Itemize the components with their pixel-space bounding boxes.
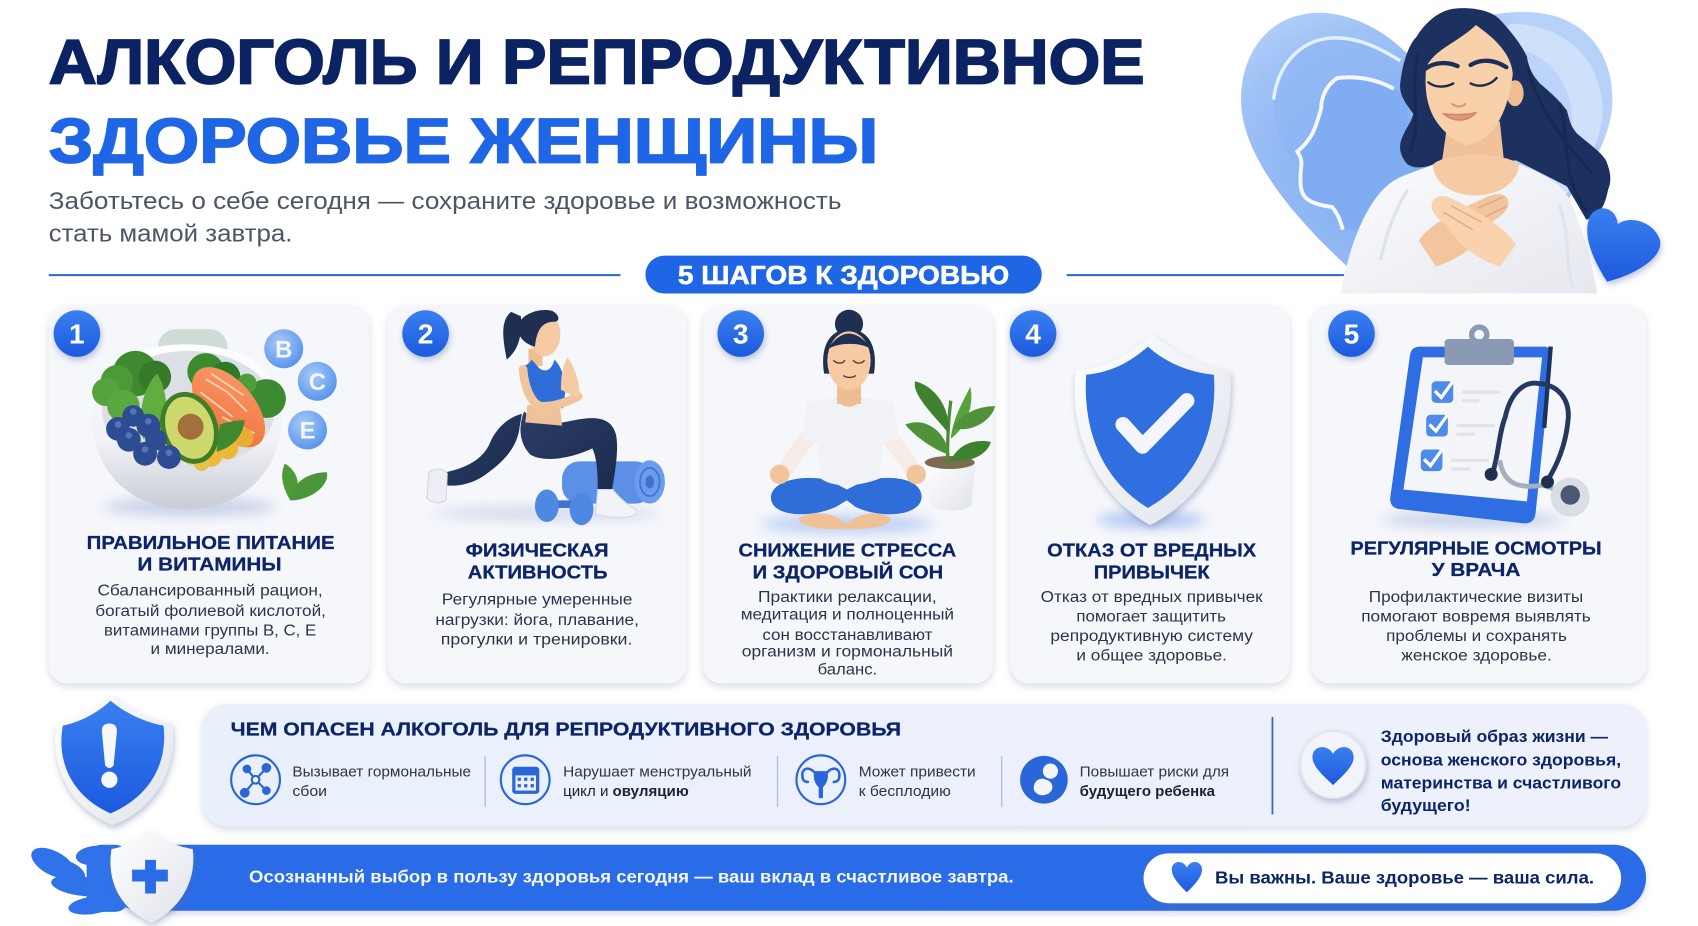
panel: step 2 activity [388, 305, 687, 683]
subtitle [49, 188, 841, 248]
icon: plus shield [110, 831, 193, 923]
illustration: woman with hands on heart [1241, 8, 1664, 294]
text: infertility: Может привести [859, 765, 976, 781]
pill: you matter [1144, 853, 1621, 903]
section heading: 5 steps [49, 256, 1344, 294]
number badge 5: 5 [1344, 318, 1359, 349]
body text step 3: медитация и полноценный [741, 606, 954, 623]
subtitle: стать мамой завтра. [49, 221, 292, 248]
heading step 5: РЕГУЛЯРНЫЕ ОСМОТРЫ [1350, 538, 1602, 559]
number badge 5 [1328, 310, 1375, 357]
body text step 4: помогает защитить [1076, 609, 1226, 626]
body text step 1: Сбалансированный рацион, [97, 583, 323, 600]
hands crossed on chest [1419, 194, 1516, 266]
icon: salad bowl with vitamins: B [275, 336, 292, 363]
callout text [1381, 727, 1621, 815]
number badge 1: 1 [69, 318, 85, 349]
body text step 1: витаминами группы В, С, Е [104, 623, 316, 640]
title [49, 27, 1145, 176]
icon: warning shield [55, 695, 173, 825]
icon: calendar [501, 755, 550, 804]
icon: leaves [26, 841, 130, 917]
body text step 2: прогулки и тренировки. [441, 631, 632, 648]
icon: meditating woman with plant [760, 310, 995, 533]
number badge 4 [1010, 310, 1056, 357]
body text step 2: нагрузки: йога, плавание, [435, 612, 639, 629]
body text step 5: Профилактические визиты [1369, 589, 1583, 606]
panel: why alcohol is dangerous [203, 704, 1646, 826]
callout text: Здоровый образ жизни — [1381, 727, 1608, 746]
body text step 4: репродуктивную систему [1050, 628, 1253, 645]
body text step 2 [435, 591, 639, 648]
panel: step 4 quit habits [1010, 305, 1290, 683]
body text step 4: и общее здоровье. [1076, 648, 1227, 665]
panel: step 5 checkups [1311, 305, 1646, 683]
body text step 5 [1361, 589, 1591, 665]
heading step 2: ФИЗИЧЕСКАЯ [466, 540, 609, 561]
body text step 3: организм и гормональный [742, 643, 953, 660]
title: ЗДОРОВЬЕ ЖЕНЩИНЫ [49, 106, 878, 176]
icon: heart badge [1301, 731, 1366, 798]
callout text: основа женского здоровья, [1381, 751, 1621, 770]
number badge 2: 2 [418, 318, 433, 349]
body text step 3 [741, 589, 954, 679]
text: infertility: к бесплодию [859, 784, 951, 800]
icon: clipboard with stethoscope [1381, 327, 1590, 527]
body text step 5: женское здоровье. [1401, 648, 1552, 665]
panel: step 3 stress and sleep [703, 305, 995, 683]
subtitle: Заботьтесь о себе сегодня — сохраните здоровье и возможность [49, 188, 841, 215]
text: cycle: Нарушает менструальный [563, 765, 752, 781]
banner text: Осознанный выбор в пользу здоровья сегодня — ваш вклад в счастливое завтра. [249, 867, 1014, 887]
panel heading: ЧЕМ ОПАСЕН АЛКОГОЛЬ ДЛЯ РЕПРОДУКТИВНОГО ЗДОРОВЬЯ [231, 718, 901, 739]
text: hormonal: Вызывает гормональные [292, 765, 471, 781]
text: child risk: Повышает риски для [1080, 765, 1229, 781]
heading step 4: ОТКАЗ ОТ ВРЕДНЫХ [1047, 540, 1257, 561]
number badge 4: 4 [1025, 318, 1041, 349]
heading step 4: ПРИВЫЧЕК [1094, 561, 1210, 582]
pill: you matter: Вы важны. Ваше здоровье — ваша сила. [1215, 868, 1594, 888]
body text step 5: проблемы и сохранять [1386, 628, 1567, 645]
text: cycle: цикл и овуляцию [563, 784, 689, 800]
icon: baby [1020, 756, 1068, 804]
icon: uterus [796, 755, 845, 804]
title: АЛКОГОЛЬ И РЕПРОДУКТИВНОЕ [49, 27, 1145, 97]
text: hormonal [292, 765, 471, 800]
number badge 2 [402, 310, 449, 357]
heading step 3 [739, 540, 956, 582]
body text step 3: сон восстанавливают [762, 627, 932, 644]
text: infertility [859, 765, 976, 800]
body text step 1: и минералами. [151, 641, 270, 658]
section heading: 5 steps: 5 ШАГОВ К ЗДОРОВЬЮ [678, 260, 1009, 290]
heading step 3: И ЗДОРОВЫЙ СОН [753, 561, 943, 582]
callout text: будущего! [1381, 796, 1471, 815]
body text step 2: Регулярные умеренные [442, 591, 633, 608]
heading step 2: АКТИВНОСТЬ [468, 561, 608, 582]
icon: salad bowl with vitamins [92, 329, 337, 516]
heading step 1: И ВИТАМИНЫ [138, 554, 282, 575]
icon: salad bowl with vitamins: C [309, 369, 326, 396]
text: cycle [563, 765, 752, 800]
number badge 3: 3 [733, 318, 749, 349]
body text step 3: Практики релаксации, [758, 589, 937, 606]
icon: salad bowl with vitamins: E [300, 418, 315, 445]
heading step 1 [87, 532, 335, 575]
banner: bottom call to action [26, 831, 1646, 923]
heading step 4 [1047, 540, 1257, 582]
text: child risk: будущего ребенка [1080, 784, 1216, 800]
heading step 5: У ВРАЧА [1432, 559, 1520, 580]
body text step 1: богатый фолиевой кислотой, [95, 603, 326, 620]
panel: step 1 nutrition [49, 305, 369, 683]
body text step 5: помогают вовремя выявлять [1361, 609, 1591, 626]
number badge 3 [717, 310, 764, 357]
body text step 1 [95, 583, 326, 658]
body text step 4: Отказ от вредных привычек [1041, 589, 1263, 606]
icon: shield with check [1075, 334, 1231, 527]
callout text: материнства и счастливого [1381, 773, 1621, 792]
icon: woman in lunge with mat and dumbbell [427, 310, 665, 525]
number badge 1 [54, 310, 100, 357]
text: child risk [1080, 765, 1229, 800]
body text step 4 [1041, 589, 1263, 665]
heading step 1: ПРАВИЛЬНОЕ ПИТАНИЕ [87, 532, 335, 553]
heading step 3: СНИЖЕНИЕ СТРЕССА [739, 540, 956, 561]
heading step 2 [466, 540, 609, 582]
text: hormonal: сбои [292, 784, 327, 800]
body text step 3: баланс. [818, 662, 877, 679]
icon: hormones [231, 755, 280, 804]
heading step 5 [1350, 538, 1602, 580]
